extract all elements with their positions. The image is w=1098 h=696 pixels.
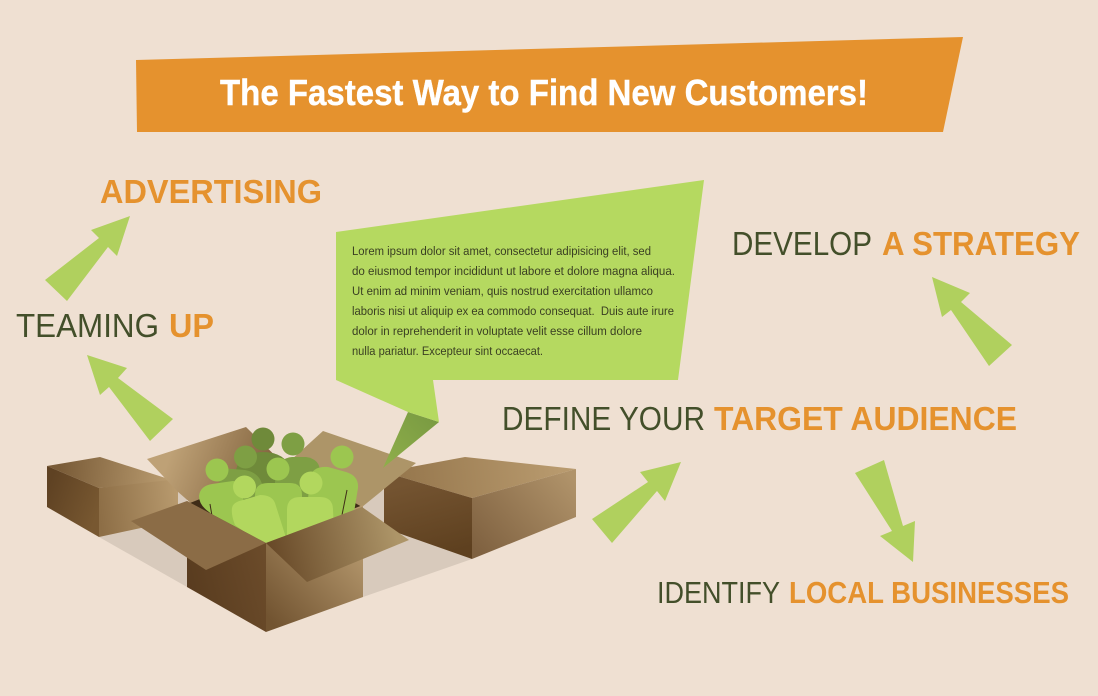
person left [199,458,258,540]
bubble shape [336,180,704,422]
heading: identify local businesses: LOCAL BUSINESSES [789,575,1069,610]
ground shadow [99,480,187,587]
open box interior [190,495,362,543]
arrow: to strategy [932,277,1012,366]
person back 1 [236,428,284,484]
arm slits [210,490,347,516]
front left flap [131,501,266,570]
bubble text: do eiusmod tempor incididunt ut labore et dolore magna aliqua. [352,264,675,278]
heading: advertising: ADVERTISING [100,173,322,210]
arrow: to target audience [592,462,681,543]
arrow: to advertising [45,216,130,301]
heading: define your target audience [502,400,1017,437]
open box front right face [266,505,363,632]
person front right [287,472,334,535]
heading: develop a strategy: A STRATEGY [882,225,1080,262]
heading: teaming up: UP [169,307,214,344]
person right [308,446,358,528]
banner shape [136,37,963,132]
bubble text: Lorem ipsum dolor sit amet, consectetur adipisicing elit, sed [352,244,651,258]
person back 2 [275,432,320,497]
person front left [232,476,286,543]
person middle [255,458,302,540]
open box back flap right [270,431,416,510]
heading: develop a strategy [732,225,1080,262]
heading: define your target audience: TARGET AUDIENCE [714,400,1017,437]
heading: teaming up: TEAMING [16,307,159,344]
heading: identify local businesses [657,575,1069,610]
ground shadow right [355,490,472,597]
bubble text: dolor in reprehenderit in voluptate velit esse cillum dolore [352,324,642,338]
left closed box [47,457,178,537]
title banner [136,37,963,132]
speech bubble [336,180,704,468]
boxes illustration [47,427,576,632]
heading: identify local businesses: IDENTIFY [657,575,780,610]
title text: The Fastest Way to Find New Customers! [220,72,868,113]
front right flap [266,507,409,582]
arrow: to teaming up [87,355,173,441]
people group [199,428,358,548]
bubble text: nulla pariatur. Excepteur sint occaecat. [352,344,543,358]
heading: develop a strategy: DEVELOP [732,225,872,262]
bubble text [352,244,675,358]
person back 3 [219,446,262,500]
open box back flap left [147,427,300,520]
heading: define your target audience: DEFINE YOUR [502,400,705,437]
open box front left face [187,501,266,632]
bubble tail fold [383,412,439,468]
bubble text: laboris nisi ut aliquip ex ea commodo consequat. Duis aute irure [352,304,674,318]
arrow: to local businesses [855,460,915,562]
bubble text: Ut enim ad minim veniam, quis nostrud exercitation ullamco [352,284,653,298]
right closed box [384,457,576,559]
